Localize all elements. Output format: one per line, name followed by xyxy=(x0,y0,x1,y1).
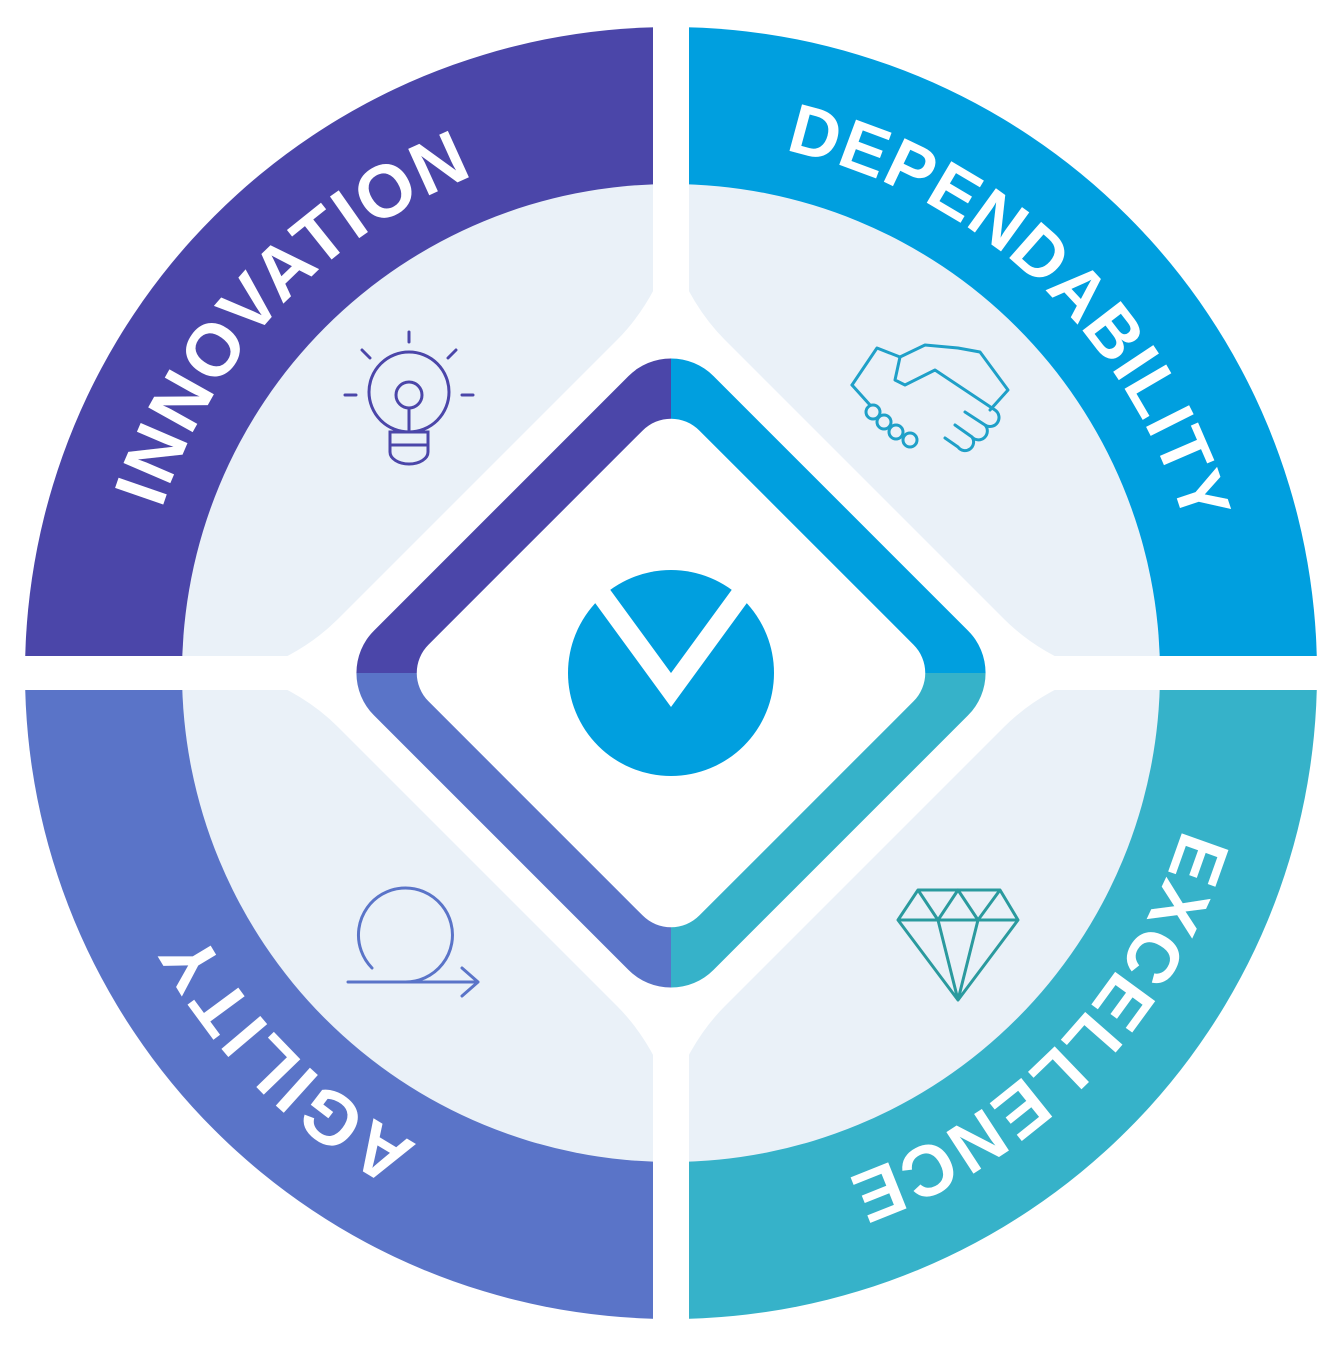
title: AGILITY: AGILITY xyxy=(158,946,416,1178)
icon: clock xyxy=(568,570,774,776)
icon: handshake xyxy=(852,345,1008,451)
icon: loop arrow xyxy=(348,888,478,996)
title: DEPENDABILITY: DEPENDABILITY xyxy=(790,104,1232,509)
icon: lightbulb xyxy=(345,332,473,464)
diamond ring xyxy=(332,334,1010,1012)
title: INNOVATION: INNOVATION xyxy=(115,130,469,504)
title: EXCELLENCE: EXCELLENCE xyxy=(850,833,1228,1223)
icon: gem xyxy=(898,890,1018,1000)
